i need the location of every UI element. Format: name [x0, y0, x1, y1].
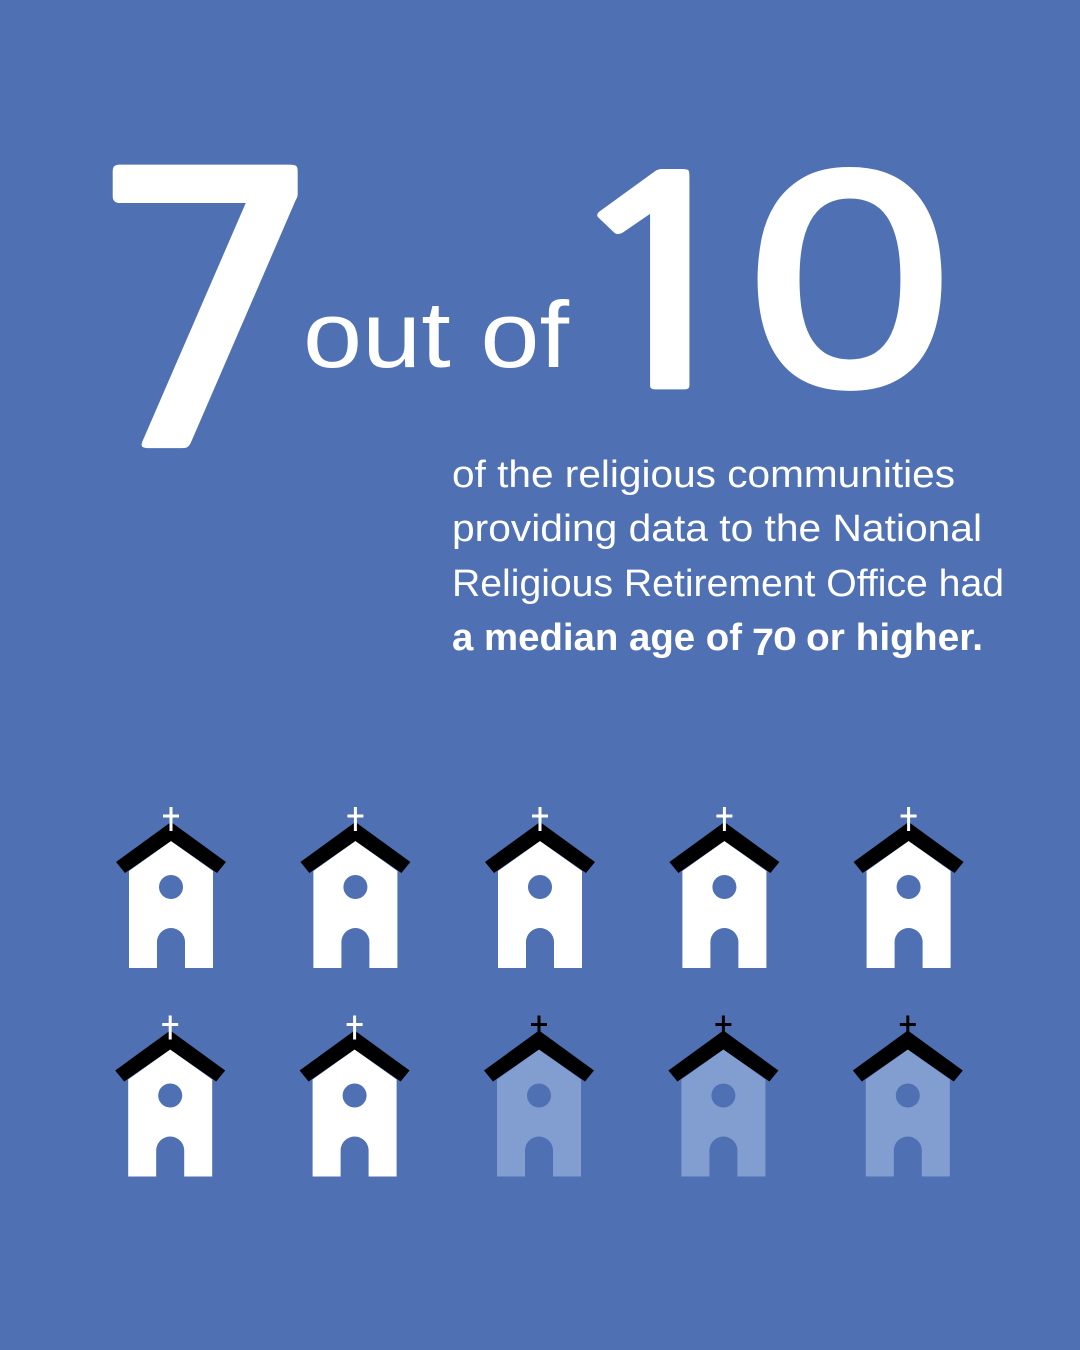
icon: church 7: [300, 1016, 410, 1176]
out of: out of: [303, 282, 570, 387]
bold statistic: 7: [752, 622, 774, 664]
big number 10: 0: [737, 146, 960, 432]
description text: Religious Retirement Office had: [452, 563, 1004, 605]
icon: church 1: [116, 807, 226, 968]
description text: providing data to the National: [452, 508, 982, 550]
headline: [87, 133, 960, 503]
big number 10: [550, 146, 960, 432]
bold statistic: 0: [773, 621, 797, 657]
bold statistic: or higher.: [806, 617, 983, 659]
icon: church 6: [115, 1016, 225, 1176]
bold statistic: a median age of: [452, 617, 742, 659]
icon: church 3: [485, 807, 595, 968]
big number 7: 7: [87, 133, 327, 503]
icon: church 5: [854, 807, 964, 968]
icon: church 10 faded: [853, 1016, 963, 1176]
bold statistic: [452, 617, 983, 664]
church icon grid: [115, 807, 964, 1176]
icon: church 8 faded: [484, 1016, 594, 1176]
icon: church 9 faded: [668, 1016, 778, 1176]
icon: church 4: [669, 807, 779, 968]
description text: [452, 454, 1004, 664]
big number 10: 1: [550, 146, 773, 432]
icon: church 2: [300, 807, 410, 968]
description text: of the religious communities: [452, 454, 955, 496]
